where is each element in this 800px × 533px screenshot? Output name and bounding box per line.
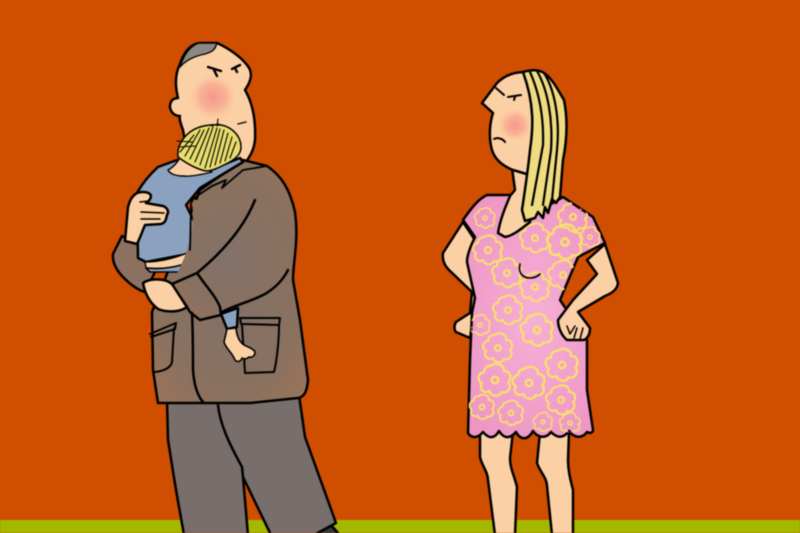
woman: face <box>482 72 535 175</box>
baby: hair <box>177 119 241 171</box>
man: cheek blush <box>188 73 238 121</box>
man: trouser fold <box>218 405 243 477</box>
man: upper hand <box>125 192 168 244</box>
woman: neck and chest <box>498 150 540 237</box>
woman: left leg <box>480 432 517 533</box>
man: lapel <box>190 166 267 250</box>
man: right pocket <box>240 318 280 373</box>
woman: fingers <box>567 326 583 339</box>
woman <box>443 70 618 533</box>
man: jacket <box>152 160 308 403</box>
woman: right leg <box>537 432 573 533</box>
man <box>113 43 338 533</box>
man: back arm sleeve <box>113 236 160 292</box>
woman: dress pattern <box>469 202 600 433</box>
man: left pocket <box>150 323 176 372</box>
man: trousers <box>167 395 336 533</box>
man: sleeve outlines <box>172 200 288 320</box>
woman: dress <box>463 195 605 438</box>
man: jaw crease <box>238 122 246 124</box>
woman: hair strands <box>530 71 558 205</box>
woman: cheek blush <box>497 108 533 142</box>
man: front sleeve <box>172 200 288 320</box>
baby: waist skin <box>145 253 197 269</box>
baby: neck <box>168 158 212 176</box>
baby: lower leg <box>221 308 238 329</box>
man: hair <box>180 43 217 67</box>
woman: left arm <box>443 222 476 338</box>
baby: torso and leg <box>137 158 243 272</box>
baby: foot <box>224 328 255 361</box>
woman: right arm <box>558 244 618 340</box>
man: jacket front edge <box>192 313 203 402</box>
man: lower hand <box>143 279 188 311</box>
woman: brows and mouth <box>494 88 521 142</box>
ground strip <box>0 520 800 533</box>
man: head <box>170 43 255 170</box>
man: shoe <box>310 524 338 533</box>
man: brows <box>208 65 240 76</box>
man: finger lines <box>140 201 164 219</box>
woman: hair <box>522 70 567 221</box>
baby: hair strands <box>177 119 236 168</box>
baby: thigh <box>146 258 215 272</box>
woman: bust line <box>519 264 540 278</box>
